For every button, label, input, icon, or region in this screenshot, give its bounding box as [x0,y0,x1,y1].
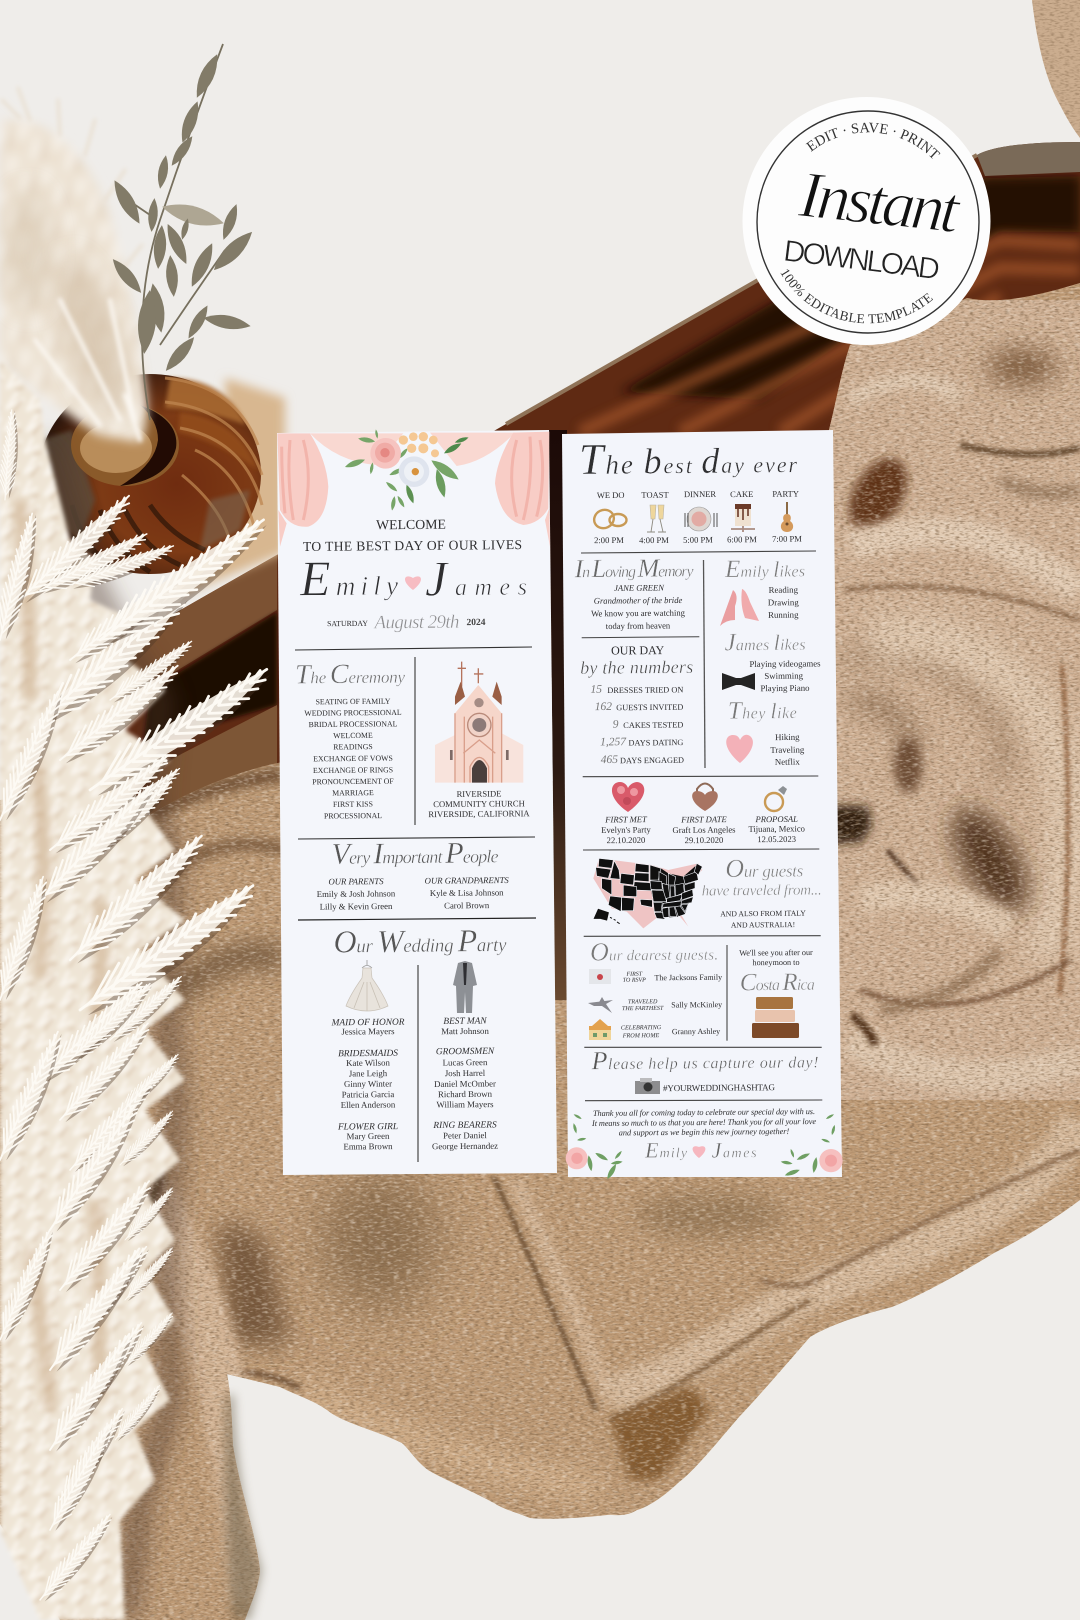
very important people [317,836,509,912]
our day by the numbers: DRESSES TRIED ON [607,685,683,695]
ceremony order: BRIDAL PROCESSIONAL [309,719,398,729]
icon: groom suit [453,961,477,1013]
vase: amber glass [39,374,262,574]
groom party column: Matt Johnson [441,1026,489,1036]
couple names: Emily [299,550,398,606]
our day by the numbers: CAKES TESTED [623,720,683,730]
milestones: 29.10.2020 [685,835,723,845]
timeline: PARTY [772,489,799,499]
floral corner right [780,1113,843,1177]
very important people: Kyle & Lisa Johnson [430,887,504,898]
bridal party column: Ellen Anderson [341,1099,396,1110]
our day by the numbers: 162 [595,701,612,713]
bridal party column: Mary Green [347,1131,390,1141]
honeymoon: honeymoon to [752,958,800,967]
welcome heading: WELCOME [376,517,446,532]
our day by the numbers: 9 [613,719,619,731]
bridal party column: Patricia Garcia [342,1089,394,1100]
icon: camera [635,1078,660,1094]
they like: Traveling [770,745,805,755]
they like: They like [728,697,797,725]
bridal party column: BRIDESMAIDS [338,1049,398,1059]
guests traveled text: Our guests [725,853,804,883]
date [327,612,486,633]
thank you message: It means so much to us that you are here! Thank you for all your love [591,1117,816,1128]
dearest guests: TO RSVP [623,978,646,984]
badge bottom text: 100% EDITABLE TEMPLATE [780,269,933,324]
emily likes [720,555,805,626]
thank you message: and support as we begin this new journey together! [619,1127,790,1137]
groom party column: Lucas Green [443,1057,488,1067]
church name and location: RIVERSIDE [457,789,501,799]
groom party column: Richard Brown [438,1089,493,1099]
timeline: 4:00 PM [639,535,669,545]
timeline: TOAST [641,490,669,500]
signature: James [711,1137,757,1162]
our day by the numbers: by the numbers [580,657,693,678]
milestones: 12.05.2023 [757,834,796,844]
dearest guests: FIRST [625,972,643,978]
our day by the numbers: 15 [590,684,602,696]
bridal party column: Kate Wilson [346,1058,390,1068]
emily likes: Running [768,610,799,620]
groom party column: BEST MAN [443,1017,487,1027]
in loving memory: today from heaven [606,620,671,631]
badge word download: DOWNLOAD [782,235,942,286]
icon: wedding dress [346,960,388,1011]
timeline: DINNER [684,489,716,499]
icon: airplane [588,997,613,1013]
ceremony order: PRONOUNCEMENT OF [312,777,394,786]
very important people: Carol Brown [444,900,490,910]
cloth corner at top right [1030,0,1080,140]
dearest guests: TRAVELED [628,999,658,1005]
icon: guitar [781,502,793,532]
icon: rose heart [612,782,644,812]
pampas grass: upper plume [0,88,152,442]
our day by the numbers: DAYS DATING [628,738,683,748]
very important people: Very Important People [331,836,499,871]
thank you message: Thank you all for coming today to celebrate our special day with us. [593,1107,815,1118]
pampas grass: lower plume [0,360,284,1620]
they like: Netflix [775,757,800,767]
in loving memory: Grandmother of the bride [594,595,683,606]
james likes: Playing videogames [749,658,821,669]
james likes: James likes [724,629,806,656]
our day by the numbers: GUESTS INVITED [616,703,683,712]
dearest guests: Granny Ashley [672,1027,720,1036]
milestones: FIRST MET [604,814,648,824]
date: SATURDAY [327,619,368,628]
church name and location [428,789,530,819]
bridal party column: Jessica Mayers [341,1026,395,1037]
dearest guests: Our dearest guests. [590,936,718,967]
timeline: 2:00 PM [594,535,624,545]
ceremony order: EXCHANGE OF RINGS [313,765,393,775]
card: wedding program front [277,429,557,1175]
groom party column: George Hernandez [432,1141,498,1151]
badge script word: Instant [795,158,964,247]
icon: pink heels [720,589,759,626]
vase shadow on surface [170,378,285,600]
icon: envelope [589,969,611,984]
bridal party column: FLOWER GIRL [337,1122,398,1133]
title: The best day ever [579,433,798,484]
our day by the numbers: OUR DAY [611,643,665,658]
very important people: Emily & Josh Johnson [317,888,396,899]
card: infographic back [562,430,843,1180]
guests traveled text: have traveled from... [702,882,822,900]
james likes [722,629,821,693]
ceremony order: SEATING OF FAMILY [316,697,391,706]
dearest guests: CELEBRATING [621,1024,662,1031]
our day by the numbers: DAYS ENGAGED [620,756,684,765]
welcome heading [303,517,522,554]
oat sprigs [108,44,257,420]
emily likes: Drawing [768,597,799,607]
ceremony order: PROCESSIONAL [324,811,382,821]
hashtag prompt: Please help us capture our day! [590,1044,819,1075]
groom party column: Daniel McOmber [434,1078,496,1089]
ceremony order: FIRST KISS [333,800,373,809]
icon: engagement ring [765,786,787,811]
gap between the cards [549,430,567,1000]
our day by the numbers: 465 [601,754,618,766]
icon: pink heart [726,735,753,763]
illustration: church [435,662,523,783]
timeline: 7:00 PM [772,534,802,544]
very important people: OUR PARENTS [328,876,384,887]
church name and location: COMMUNITY CHURCH [433,798,525,809]
illustration: floral bouquet [344,429,469,511]
thank you message [591,1107,816,1137]
ceremony order: The Ceremony [295,659,406,690]
groom party column [432,1017,498,1151]
groom party column: Josh Harrel [445,1068,486,1078]
dearest guests: FROM HOME [622,1032,660,1039]
badge: instant download [742,97,990,345]
milestones: Evelyn's Party [601,824,652,835]
dearest guests [588,936,722,1040]
milestones: FIRST DATE [680,814,728,825]
very important people: OUR GRANDPARENTS [425,875,509,886]
church name and location: RIVERSIDE, CALIFORNIA [428,808,530,819]
honeymoon [739,948,815,1038]
icon: cake [731,504,755,532]
ceremony order [295,659,406,821]
timeline [591,489,802,545]
milestones: PROPOSAL [754,814,798,824]
timeline: 6:00 PM [727,534,757,544]
our day by the numbers [580,643,693,766]
cloth folds lower side [300,1120,1080,1490]
ceremony order: WELCOME [333,731,373,740]
bridal party column [331,1018,405,1152]
couple names [299,550,527,606]
date: August 29th [372,612,460,633]
milestones: Tijuana, Mexico [748,823,805,834]
map: USA states visited [593,858,702,928]
icon: house [589,1019,611,1040]
icon: stacked suitcases [752,997,799,1038]
cloth folds left side [145,775,300,1600]
ceremony order: EXCHANGE OF VOWS [313,754,393,763]
icon: padlock heart [692,784,718,811]
wooden serving board [100,142,1080,820]
cloth folds right side [825,349,1080,1076]
in loving memory [573,553,695,631]
ceremony order: READINGS [333,742,373,751]
in loving memory: In Loving Memory [573,553,695,583]
badge top text: EDIT · SAVE · PRINT [806,122,940,159]
ceremony order: MARRIAGE [332,788,374,797]
guests traveled text: AND ALSO FROM ITALY [720,909,806,918]
couple names: J ames [425,550,527,606]
dearest guests: The Jacksons Family [654,973,722,982]
very important people: Lilly & Kevin Green [320,901,393,912]
milestones: Graft Los Angeles [672,824,736,835]
timeline: CAKE [730,489,753,499]
icon: champagne glasses [647,505,666,532]
groom party column: RING BEARERS [432,1120,497,1131]
our day by the numbers: 1,257 [600,736,627,748]
wedding party heading: Our Wedding Party [333,922,507,959]
groom party column: Peter Daniel [443,1130,487,1140]
shadow of cloth on surface [225,1395,262,1620]
hashtag prompt: #YOURWEDDINGHASHTAG [663,1082,776,1093]
honeymoon: Costa Rica [740,969,815,996]
signature [644,1137,757,1162]
icon: rings [591,507,626,531]
bridal party column: Ginny Winter [344,1078,392,1089]
guests traveled text: AND AUSTRALIA! [731,920,795,930]
icon: dinner plate [685,507,717,531]
illustration: pink curtains [277,432,550,547]
date: 2024 [466,618,486,628]
dearest guests: Sally McKinley [671,1000,722,1010]
emily likes: Reading [769,585,799,595]
bridal party column: Jane Leigh [349,1068,388,1078]
ceremony order: WEDDING PROCESSIONAL [304,708,402,718]
james likes: Playing Piano [760,683,810,693]
timeline: WE DO [597,490,625,500]
floral corner left [566,1113,623,1180]
groom party column: William Mayers [436,1099,494,1110]
in loving memory: JANE GREEN [614,582,665,593]
icon: bow tie [722,673,755,690]
in loving memory: We know you are watching [591,608,686,618]
james likes: Swimming [764,671,804,681]
guests traveled text [702,853,822,930]
milestones [601,782,805,845]
signature: Emily [644,1137,688,1162]
honeymoon: We'll see you after our [739,948,813,958]
they like [726,697,805,767]
bridal party column: MAID OF HONOR [331,1018,405,1028]
dearest guests: THE FARTHEST [622,1006,664,1012]
emily likes: Emily likes [724,555,805,583]
they like: Hiking [775,732,800,742]
bridal party column: Emma Brown [343,1141,393,1152]
milestones: 22.10.2020 [607,835,645,845]
groom party column: GROOMSMEN [436,1047,495,1057]
timeline: 5:00 PM [683,535,713,545]
welcome heading: TO THE BEST DAY OF OUR LIVES [303,537,522,554]
hashtag prompt [590,1044,819,1094]
